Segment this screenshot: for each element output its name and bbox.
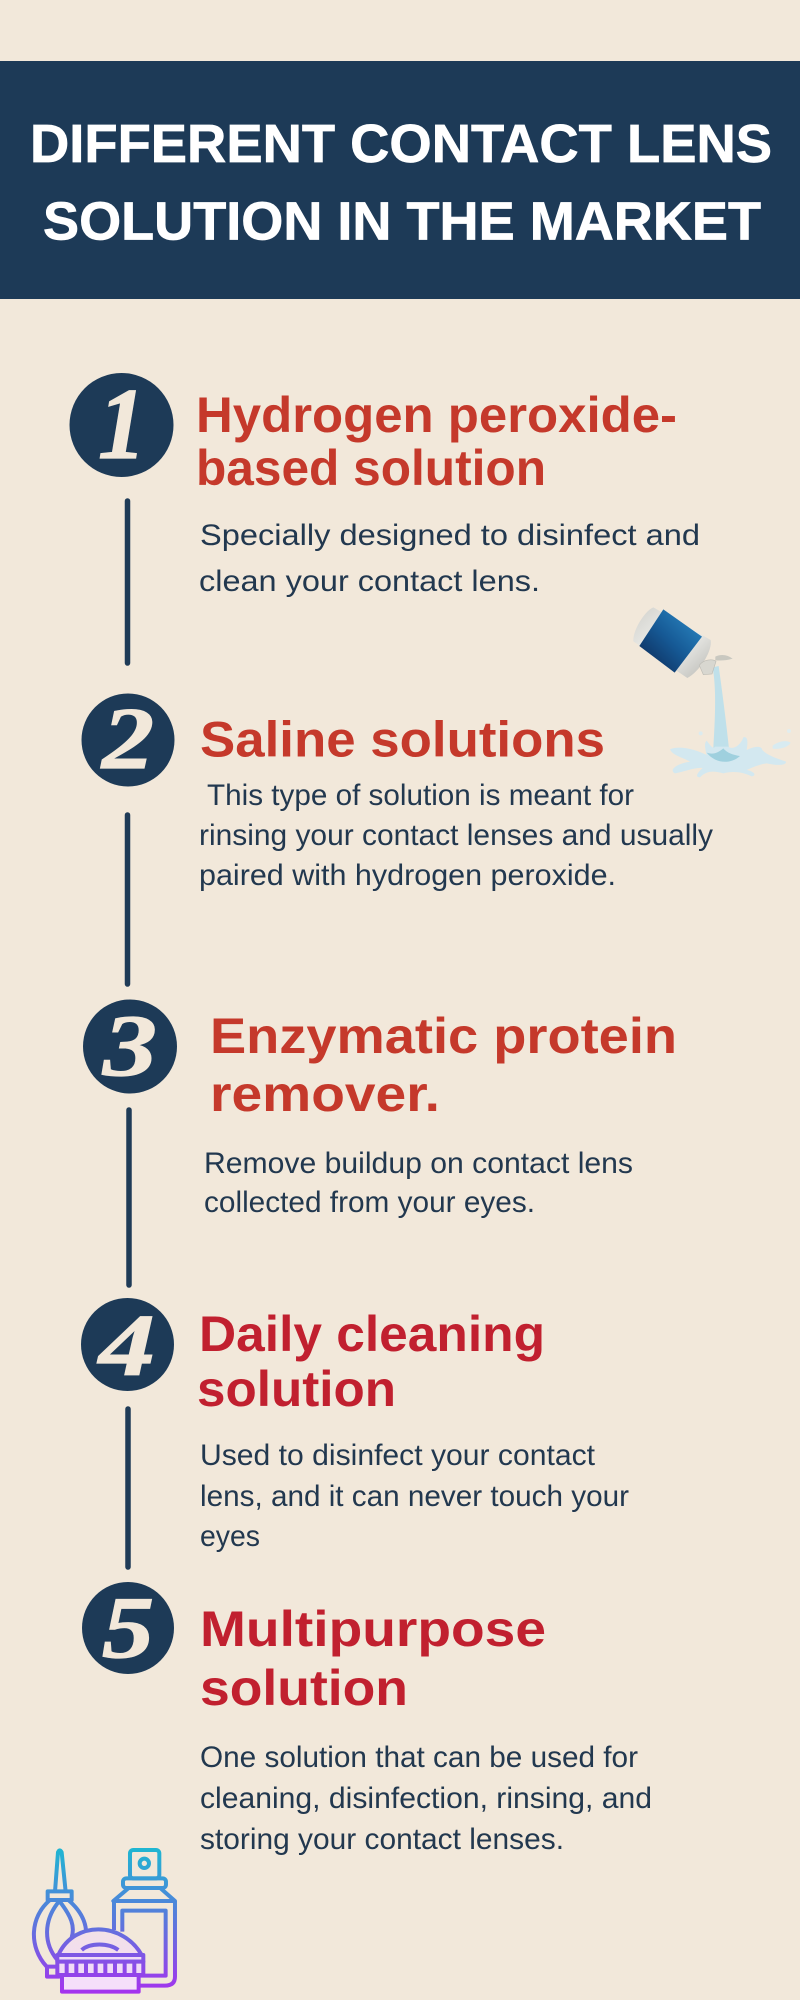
number badge 3: 3 (102, 998, 157, 1095)
title banner (0, 61, 800, 299)
body text 4: eyes (200, 1520, 260, 1553)
number badge 1 (70, 368, 174, 481)
title (30, 114, 772, 252)
icon: solution bottle pouring with splash (633, 607, 791, 777)
title: DIFFERENT CONTACT LENS (30, 114, 772, 174)
connector line 2 (125, 815, 130, 984)
body text 5: storing your contact lenses. (200, 1823, 564, 1856)
heading 2: Saline solutions (200, 712, 605, 768)
title: SOLUTION IN THE MARKET (43, 192, 761, 252)
body text 4: lens, and it can never touch your (200, 1480, 629, 1513)
spray bottle (113, 1850, 175, 1986)
body text 4: Used to disinfect your contact (200, 1439, 596, 1472)
body text 3: collected from your eyes. (204, 1186, 535, 1219)
heading 1 (196, 387, 677, 496)
body text 5 (200, 1741, 652, 1856)
number badge 4 (81, 1298, 174, 1395)
body text 5: cleaning, disinfection, rinsing, and (200, 1782, 652, 1815)
dropper (34, 1850, 86, 1977)
heading 1: based solution (196, 440, 546, 496)
step 2: saline solutions (82, 691, 713, 984)
body text 1: clean your contact lens. (199, 565, 540, 598)
heading 4: solution (197, 1361, 396, 1417)
body text 1 (199, 519, 700, 598)
heading 5 (200, 1601, 546, 1716)
number badge 3 (83, 998, 177, 1095)
body text 4 (200, 1439, 629, 1553)
body text 3 (204, 1147, 633, 1219)
body text 1: Specially designed to disinfect and (200, 519, 700, 552)
body text 2: This type of solution is meant for (207, 779, 634, 812)
number badge 5 (82, 1580, 174, 1677)
body text 3: Remove buildup on contact lens (204, 1147, 633, 1180)
icon: dropper, spray bottle and lens case (34, 1850, 175, 1992)
heading 3: remover. (210, 1066, 440, 1122)
number badge 5: 5 (102, 1580, 154, 1677)
heading 4: Daily cleaning (199, 1306, 545, 1362)
body text 2: rinsing your contact lenses and usually (199, 819, 713, 852)
lens case (57, 1929, 143, 1992)
body text 2 (199, 779, 713, 892)
number badge 4: 4 (96, 1298, 155, 1395)
connector line 3 (126, 1110, 132, 1285)
number badge 1: 1 (98, 368, 146, 481)
heading 3 (210, 1008, 677, 1122)
heading 3: Enzymatic protein (210, 1008, 677, 1064)
body text 2: paired with hydrogen peroxide. (199, 859, 616, 892)
step 4: daily cleaning solution (81, 1298, 629, 1567)
number badge 2 (82, 691, 174, 788)
connector line 4 (125, 1409, 131, 1567)
step 1: hydrogen peroxide-based solution (70, 368, 700, 663)
body text 5: One solution that can be used for (200, 1741, 638, 1774)
connector line 1 (125, 501, 130, 663)
heading 5: Multipurpose (200, 1601, 546, 1657)
heading 1: Hydrogen peroxide- (196, 387, 677, 443)
heading 4 (197, 1306, 545, 1417)
step 3: enzymatic protein remover (83, 998, 677, 1285)
heading 5: solution (200, 1660, 408, 1716)
step 5: multipurpose solution (82, 1580, 652, 1856)
number badge 2: 2 (100, 691, 154, 788)
